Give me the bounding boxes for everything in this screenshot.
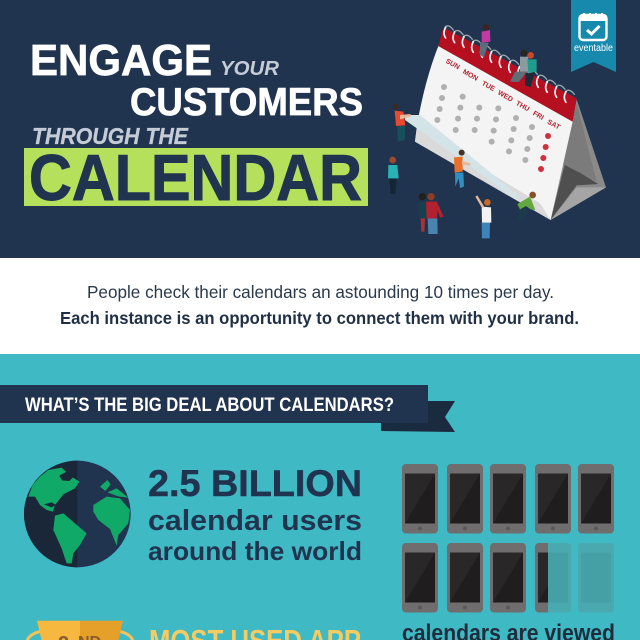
stat number: 2.5 BILLION (148, 463, 362, 504)
header panel (0, 0, 640, 258)
couple standing (418, 193, 444, 234)
icon: globe (24, 461, 131, 567)
weekday labels: TUE (480, 80, 496, 93)
weekday labels: WED (496, 90, 514, 104)
teal stats panel (0, 354, 640, 640)
stat label line one: calendar users (148, 505, 362, 537)
section banner (0, 385, 455, 432)
calendar red date dots (538, 133, 551, 172)
stat: 2.5 billion users (148, 463, 362, 566)
man in white waving (475, 195, 491, 238)
weekday labels: SUN (444, 58, 461, 71)
intro line two: Each instance is an opportunity to connect them with your brand. (60, 308, 579, 328)
banner tail (381, 401, 455, 432)
weekday labels: MON (461, 69, 479, 83)
stat label line two: around the world (148, 536, 362, 566)
calendar back stand (551, 99, 606, 220)
person pulling page (393, 104, 411, 142)
title: engage: ENGAGE (30, 36, 212, 85)
title: through the: THROUGH THE (32, 123, 189, 149)
title: your: YOUR (220, 58, 280, 80)
weekday labels: SAT (546, 119, 562, 132)
woman sitting on calendar (480, 24, 490, 57)
icon: trophy (27, 621, 133, 640)
banner heading: WHAT’S THE BIG DEAL ABOUT CALENDARS? (25, 395, 394, 416)
phone pictogram chart (402, 464, 614, 612)
weekday labels: THU (514, 100, 530, 113)
title: calendar: CALENDAR (29, 142, 362, 214)
calendar page (405, 46, 573, 220)
woman in teal (388, 157, 399, 194)
intro panel (0, 258, 640, 354)
man in green pushing (517, 192, 536, 221)
title (24, 36, 368, 214)
intro text (60, 282, 579, 328)
title: customers: CUSTOMERS (130, 81, 363, 124)
title highlight bar (24, 148, 368, 206)
banner body (0, 385, 428, 423)
calendar spiral rings (444, 26, 574, 102)
couple sitting on calendar (510, 50, 537, 87)
weekday labels: FRI (531, 110, 545, 122)
weekday labels (444, 58, 562, 132)
eventable badge (571, 0, 616, 72)
badge wordmark: eventable (574, 42, 613, 54)
icon: calendar check (580, 13, 606, 40)
man in orange (454, 150, 471, 188)
badge ribbon (571, 0, 616, 72)
intro line one: People check their calendars an astounding 10 times per day. (87, 282, 554, 302)
calendar illustration with people (388, 24, 606, 238)
calendar red header (438, 27, 577, 122)
calendar grey date dots (434, 84, 535, 163)
